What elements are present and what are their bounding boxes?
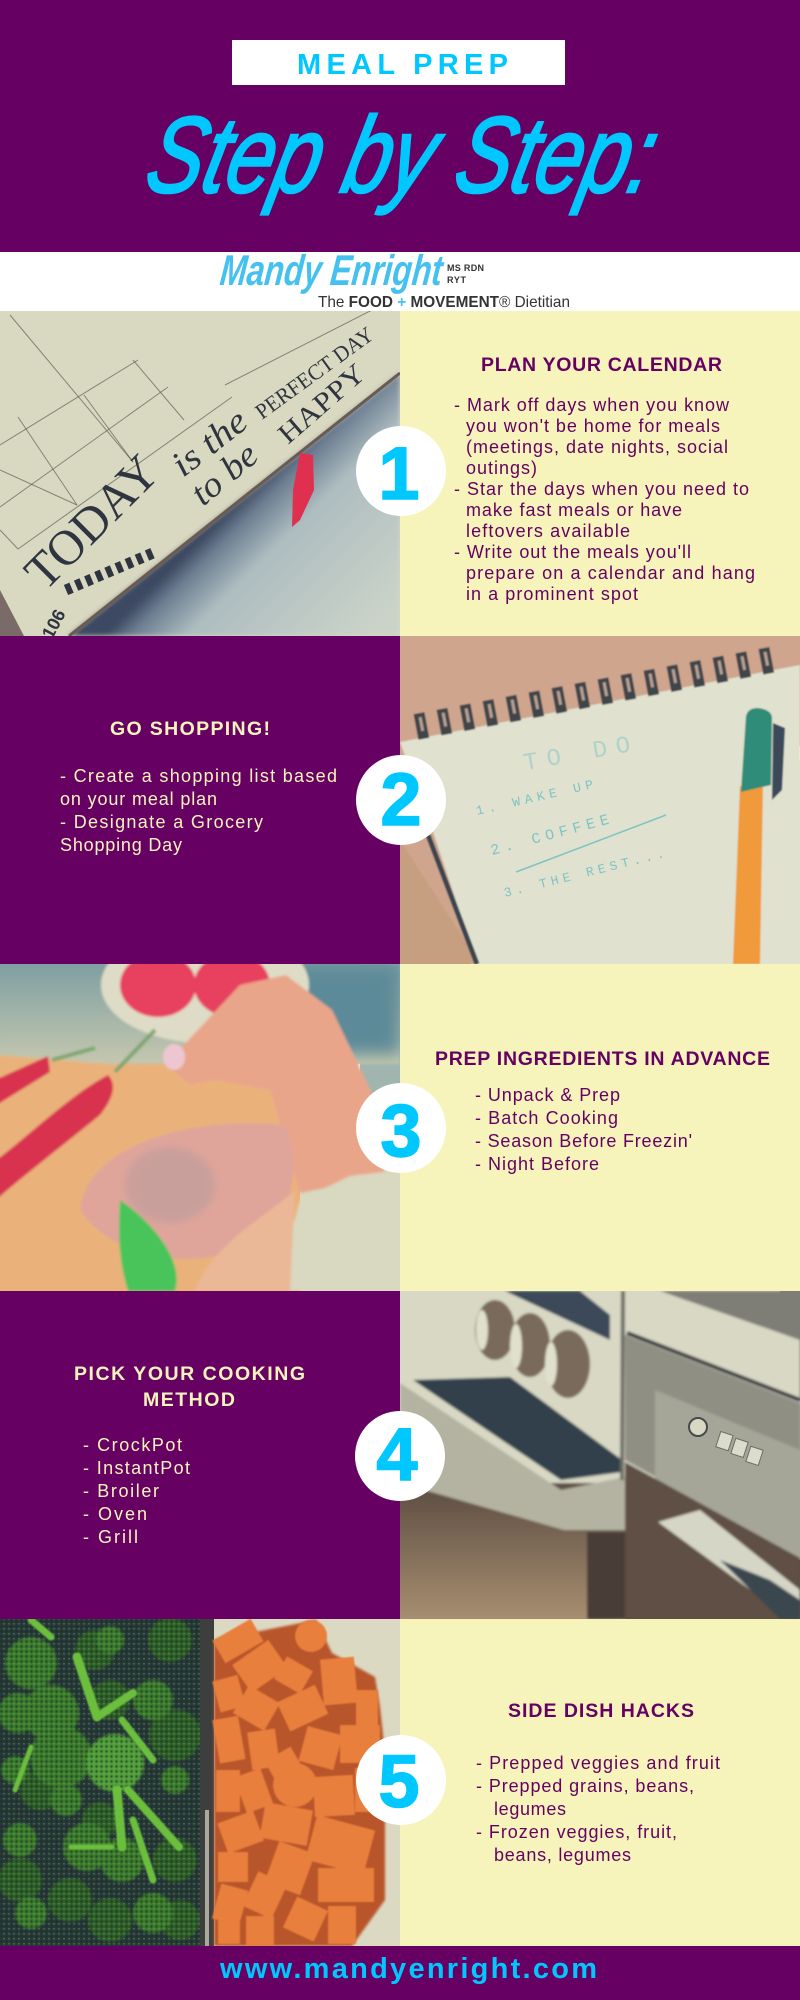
logo credentials: RYT [447,275,466,285]
logo signature: Mandy Enright [218,247,446,295]
bullet list: - Season Before Freezin' [475,1131,692,1151]
bullet list: on your meal plan [60,789,217,809]
panel 1: plan your calendar [0,310,800,642]
number badge 3: 3 [380,1089,422,1172]
number badge 1: 1 [378,432,420,515]
bullet list: - Grill [83,1527,138,1547]
panel 4: cooking method [0,1291,800,1619]
photo: broccoli and carrots [0,1618,400,1946]
bullet list: - Mark off days when you know [454,395,730,415]
logo band [0,247,800,311]
bullet list: - Star the days when you need to [454,479,749,499]
bullet list [83,1435,190,1547]
photo: to-do notebook: 2. COFFEE [489,812,611,860]
logo credentials: MS RDN [447,263,484,273]
bullet list: - Oven [83,1504,147,1524]
bullet list: - Batch Cooking [475,1108,618,1128]
bullet list: make fast meals or have [466,500,682,520]
photo: to-do notebook: 3. THE REST... [502,846,666,901]
bullet list: - Prepped grains, beans, [476,1776,694,1796]
title: step by step: Step by Step: [137,95,669,216]
photo: calendar page [0,310,400,642]
header banner [0,0,800,252]
heading: GO SHOPPING! [110,718,270,740]
photo: to-do notebook: 1. WAKE UP [475,777,595,819]
bullet list: you won't be home for meals [466,416,720,436]
bullet list: - Unpack & Prep [475,1085,620,1105]
photo: oven [400,1291,800,1619]
bullet list: leftovers available [466,521,630,541]
photo: to-do notebook: TO DO [522,733,633,778]
number badge 5 [356,1735,446,1825]
photo: calendar page: 106 [38,606,70,642]
footer [0,1946,800,2000]
number badge 2: 2 [380,758,422,841]
bullet list: - InstantPot [83,1458,190,1478]
photo: calendar page: to be [182,434,266,513]
bullet list [454,395,755,604]
logo credentials [447,263,484,285]
bullet list: - Prepped veggies and fruit [476,1753,720,1773]
footer: www.mandyenright.com [219,1953,597,1985]
heading: PICK YOUR COOKING [74,1363,305,1385]
panel 2: go shopping [0,636,800,964]
number badge 4 [355,1411,445,1501]
bullet list: legumes [494,1799,566,1819]
number badge 5: 5 [378,1740,420,1823]
heading: PLAN YOUR CALENDAR [481,354,722,376]
photo: chicken on cutting board [0,964,400,1291]
number badge 1 [356,426,446,516]
bullet list: Shopping Day [60,835,182,855]
subtitle box: meal prep: MEAL PREP [297,49,508,81]
bullet list: - Write out the meals you'll [454,542,691,562]
panel 3: prep ingredients [0,964,800,1291]
bullet list: outings) [466,458,537,478]
subtitle box: meal prep [232,40,565,85]
bullet list [476,1753,720,1865]
heading: METHOD [143,1389,235,1411]
bullet list: - Broiler [83,1481,159,1501]
heading [74,1363,305,1411]
panel 5: side dish hacks [0,1618,800,1946]
number badge 2 [356,755,446,845]
heading: PREP INGREDIENTS IN ADVANCE [435,1048,770,1070]
bullet list: (meetings, date nights, social [466,437,728,457]
bullet list [60,766,337,855]
photo: calendar page: PERFECT DAY [250,321,378,424]
number badge 4: 4 [376,1413,418,1496]
photo: to-do notebook [400,636,800,964]
logo tagline: The FOOD + MOVEMENT® Dietitian [318,294,570,311]
bullet list: beans, legumes [494,1845,631,1865]
photo: calendar page: TODAY [13,444,169,600]
bullet list: - Night Before [475,1154,599,1174]
bullet list: - Designate a Grocery [60,812,263,832]
bullet list: - CrockPot [83,1435,182,1455]
bullet list: - Create a shopping list based [60,766,337,786]
photo: calendar page: is the [163,400,255,484]
photo: calendar page: HAPPY [272,358,372,450]
bullet list: in a prominent spot [466,584,638,604]
bullet list: prepare on a calendar and hang [466,563,755,583]
heading: SIDE DISH HACKS [508,1700,694,1722]
bullet list [475,1085,692,1174]
number badge 3 [356,1083,446,1173]
bullet list: - Frozen veggies, fruit, [476,1822,677,1842]
